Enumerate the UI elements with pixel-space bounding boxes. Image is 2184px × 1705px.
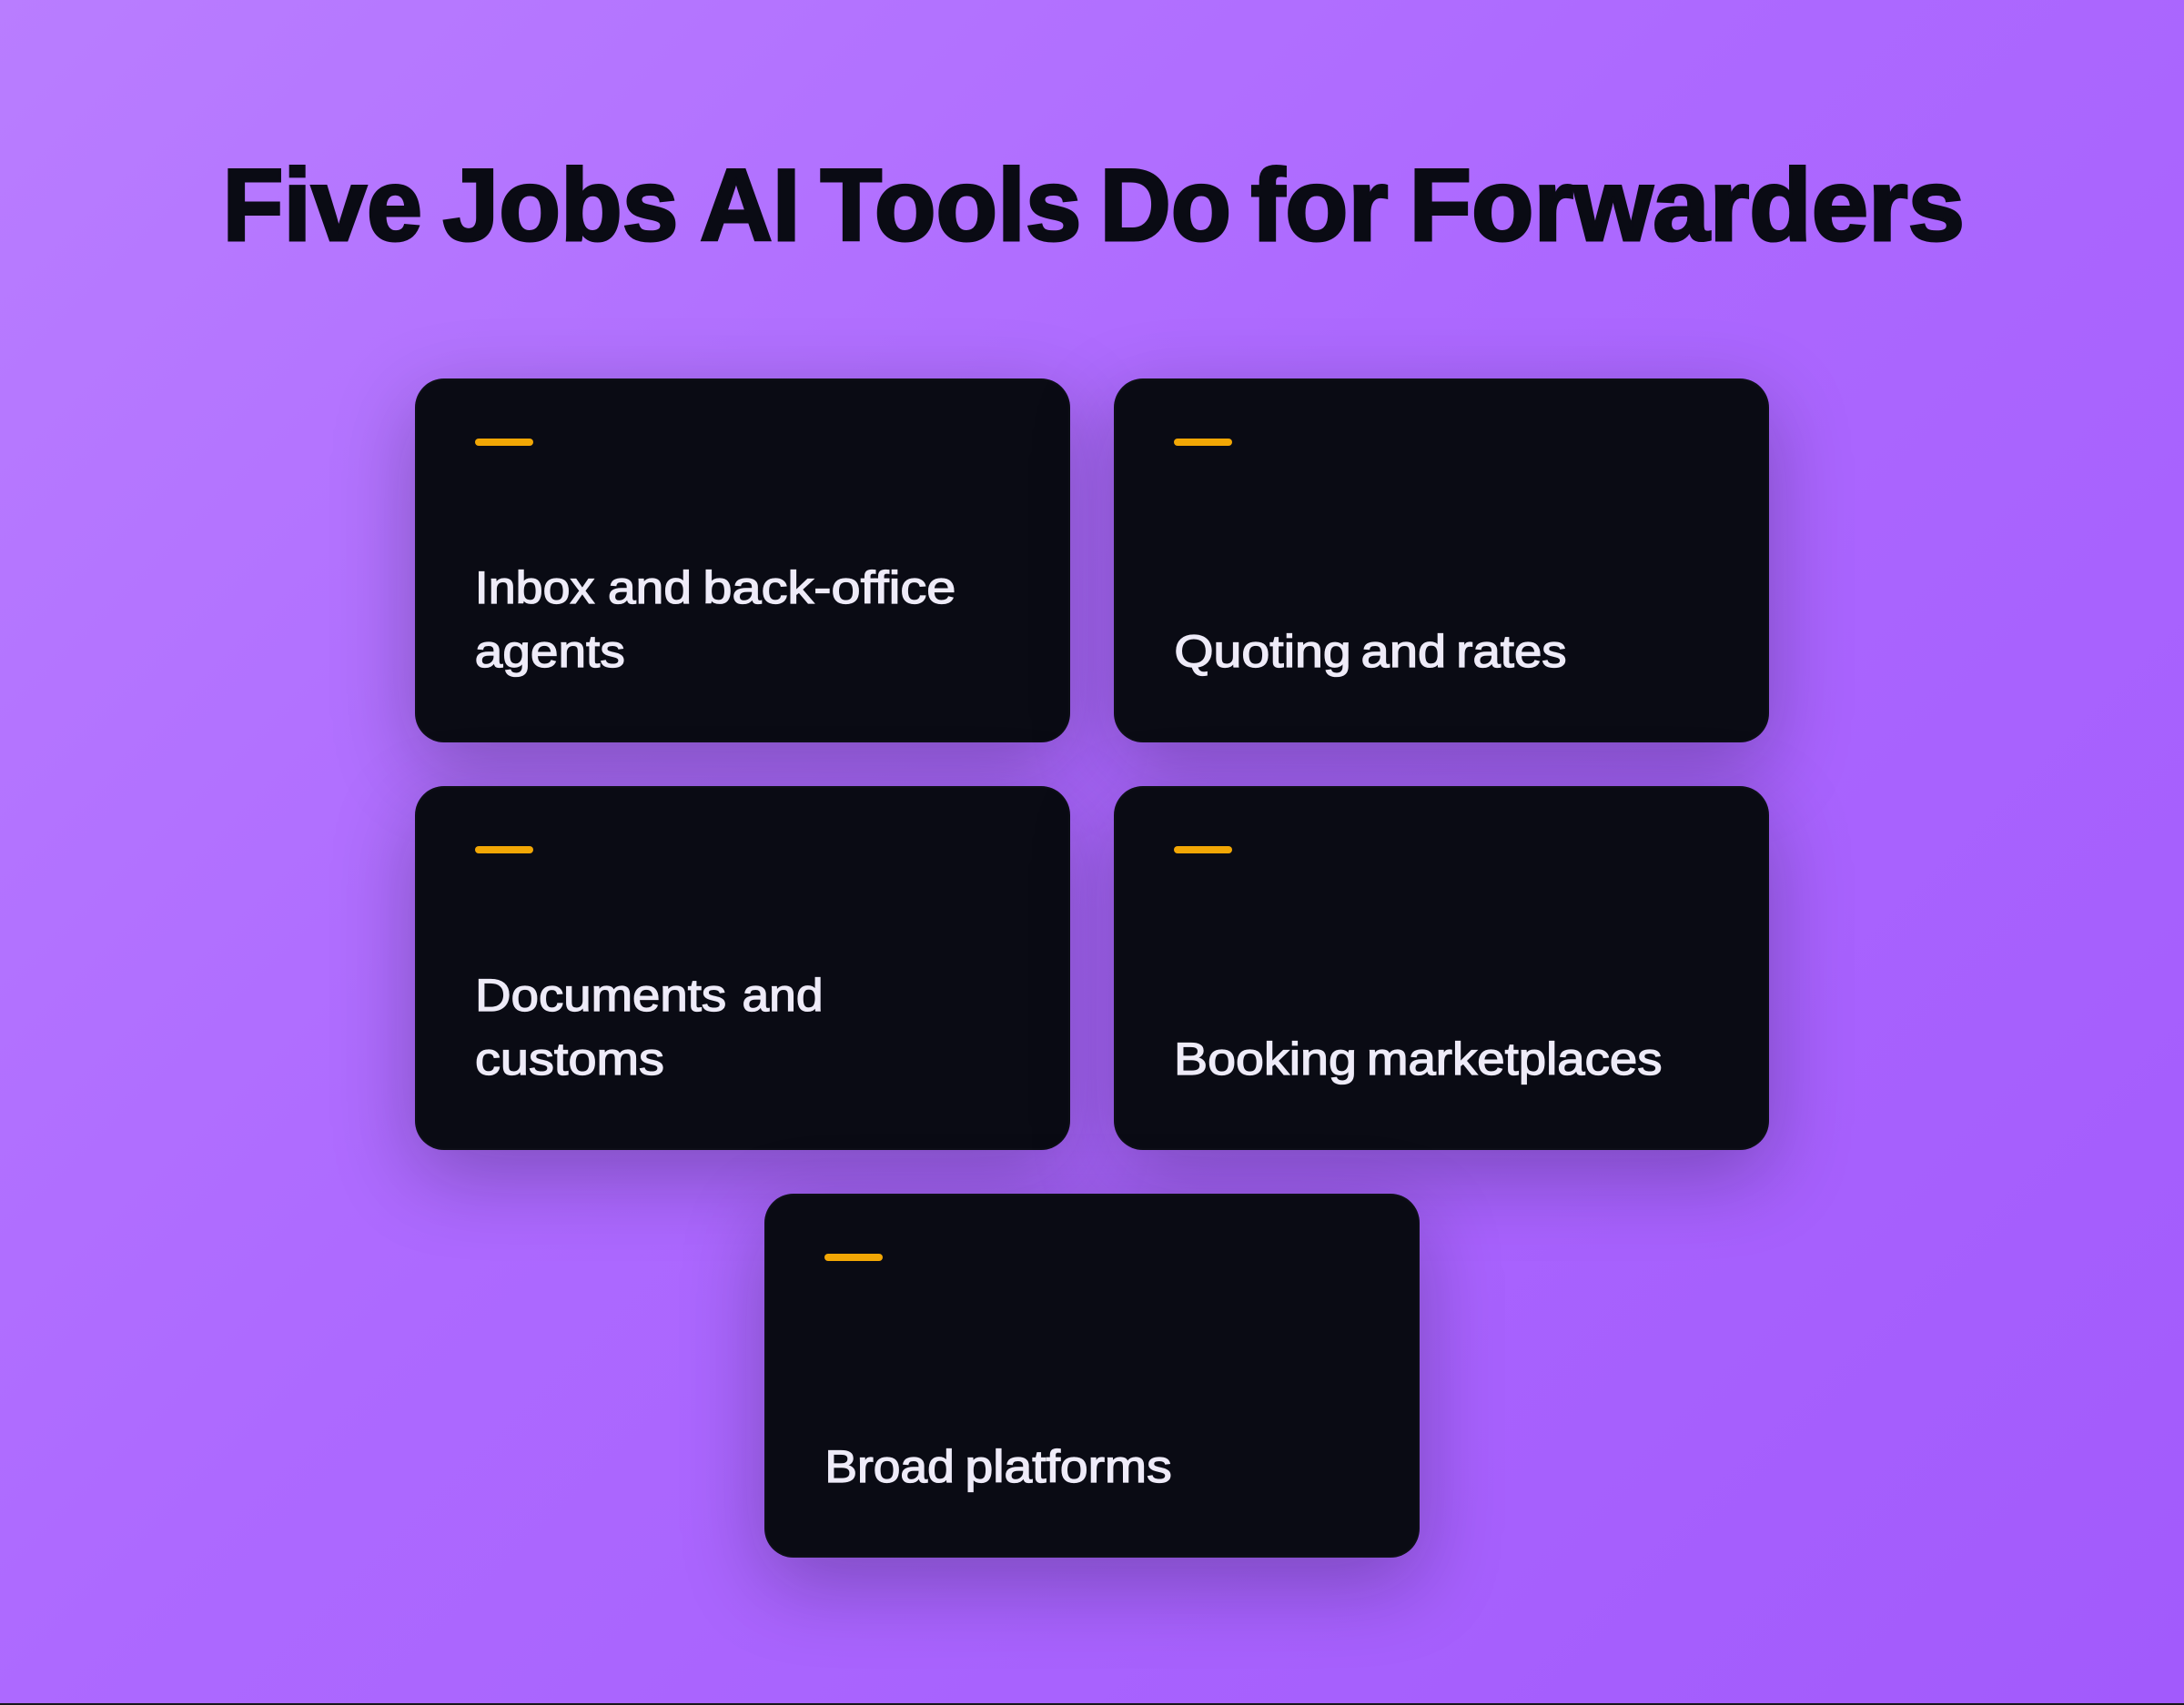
accent bar	[475, 846, 533, 853]
panel: broad platforms	[764, 1194, 1420, 1558]
card label: platforms	[965, 1441, 1172, 1492]
card label	[475, 562, 956, 677]
card label	[824, 1441, 1172, 1492]
accent bar	[824, 1254, 883, 1261]
card label: back-office	[703, 562, 956, 613]
title: for	[1250, 148, 1389, 262]
card label	[475, 970, 823, 1085]
card label: and	[743, 970, 823, 1021]
card label: rates	[1456, 626, 1567, 677]
title: Forwarders	[1409, 148, 1965, 262]
panel: inbox and back-office agents	[415, 378, 1070, 742]
panel: documents and customs	[415, 786, 1070, 1150]
card label: Broad	[824, 1441, 955, 1492]
card label: and	[608, 562, 692, 613]
title: Do	[1099, 148, 1231, 262]
title: Jobs	[442, 148, 679, 262]
card label: marketplaces	[1367, 1034, 1662, 1085]
panel: booking marketplaces	[1114, 786, 1769, 1150]
card label: customs	[475, 1034, 664, 1085]
card label: Inbox	[475, 562, 594, 613]
card label	[1174, 626, 1567, 677]
title: Tools	[821, 148, 1081, 262]
title: Five	[222, 148, 422, 262]
accent bar	[475, 439, 533, 446]
title: AI	[700, 148, 801, 262]
card label	[1174, 1034, 1662, 1085]
accent bar	[1174, 439, 1232, 446]
card label: and	[1361, 626, 1446, 677]
card label: agents	[475, 626, 625, 677]
card label: Booking	[1174, 1034, 1357, 1085]
card label: Quoting	[1174, 626, 1351, 677]
panel: quoting and rates	[1114, 378, 1769, 742]
accent bar	[1174, 846, 1232, 853]
title	[222, 148, 1965, 262]
card label: Documents	[475, 970, 726, 1021]
